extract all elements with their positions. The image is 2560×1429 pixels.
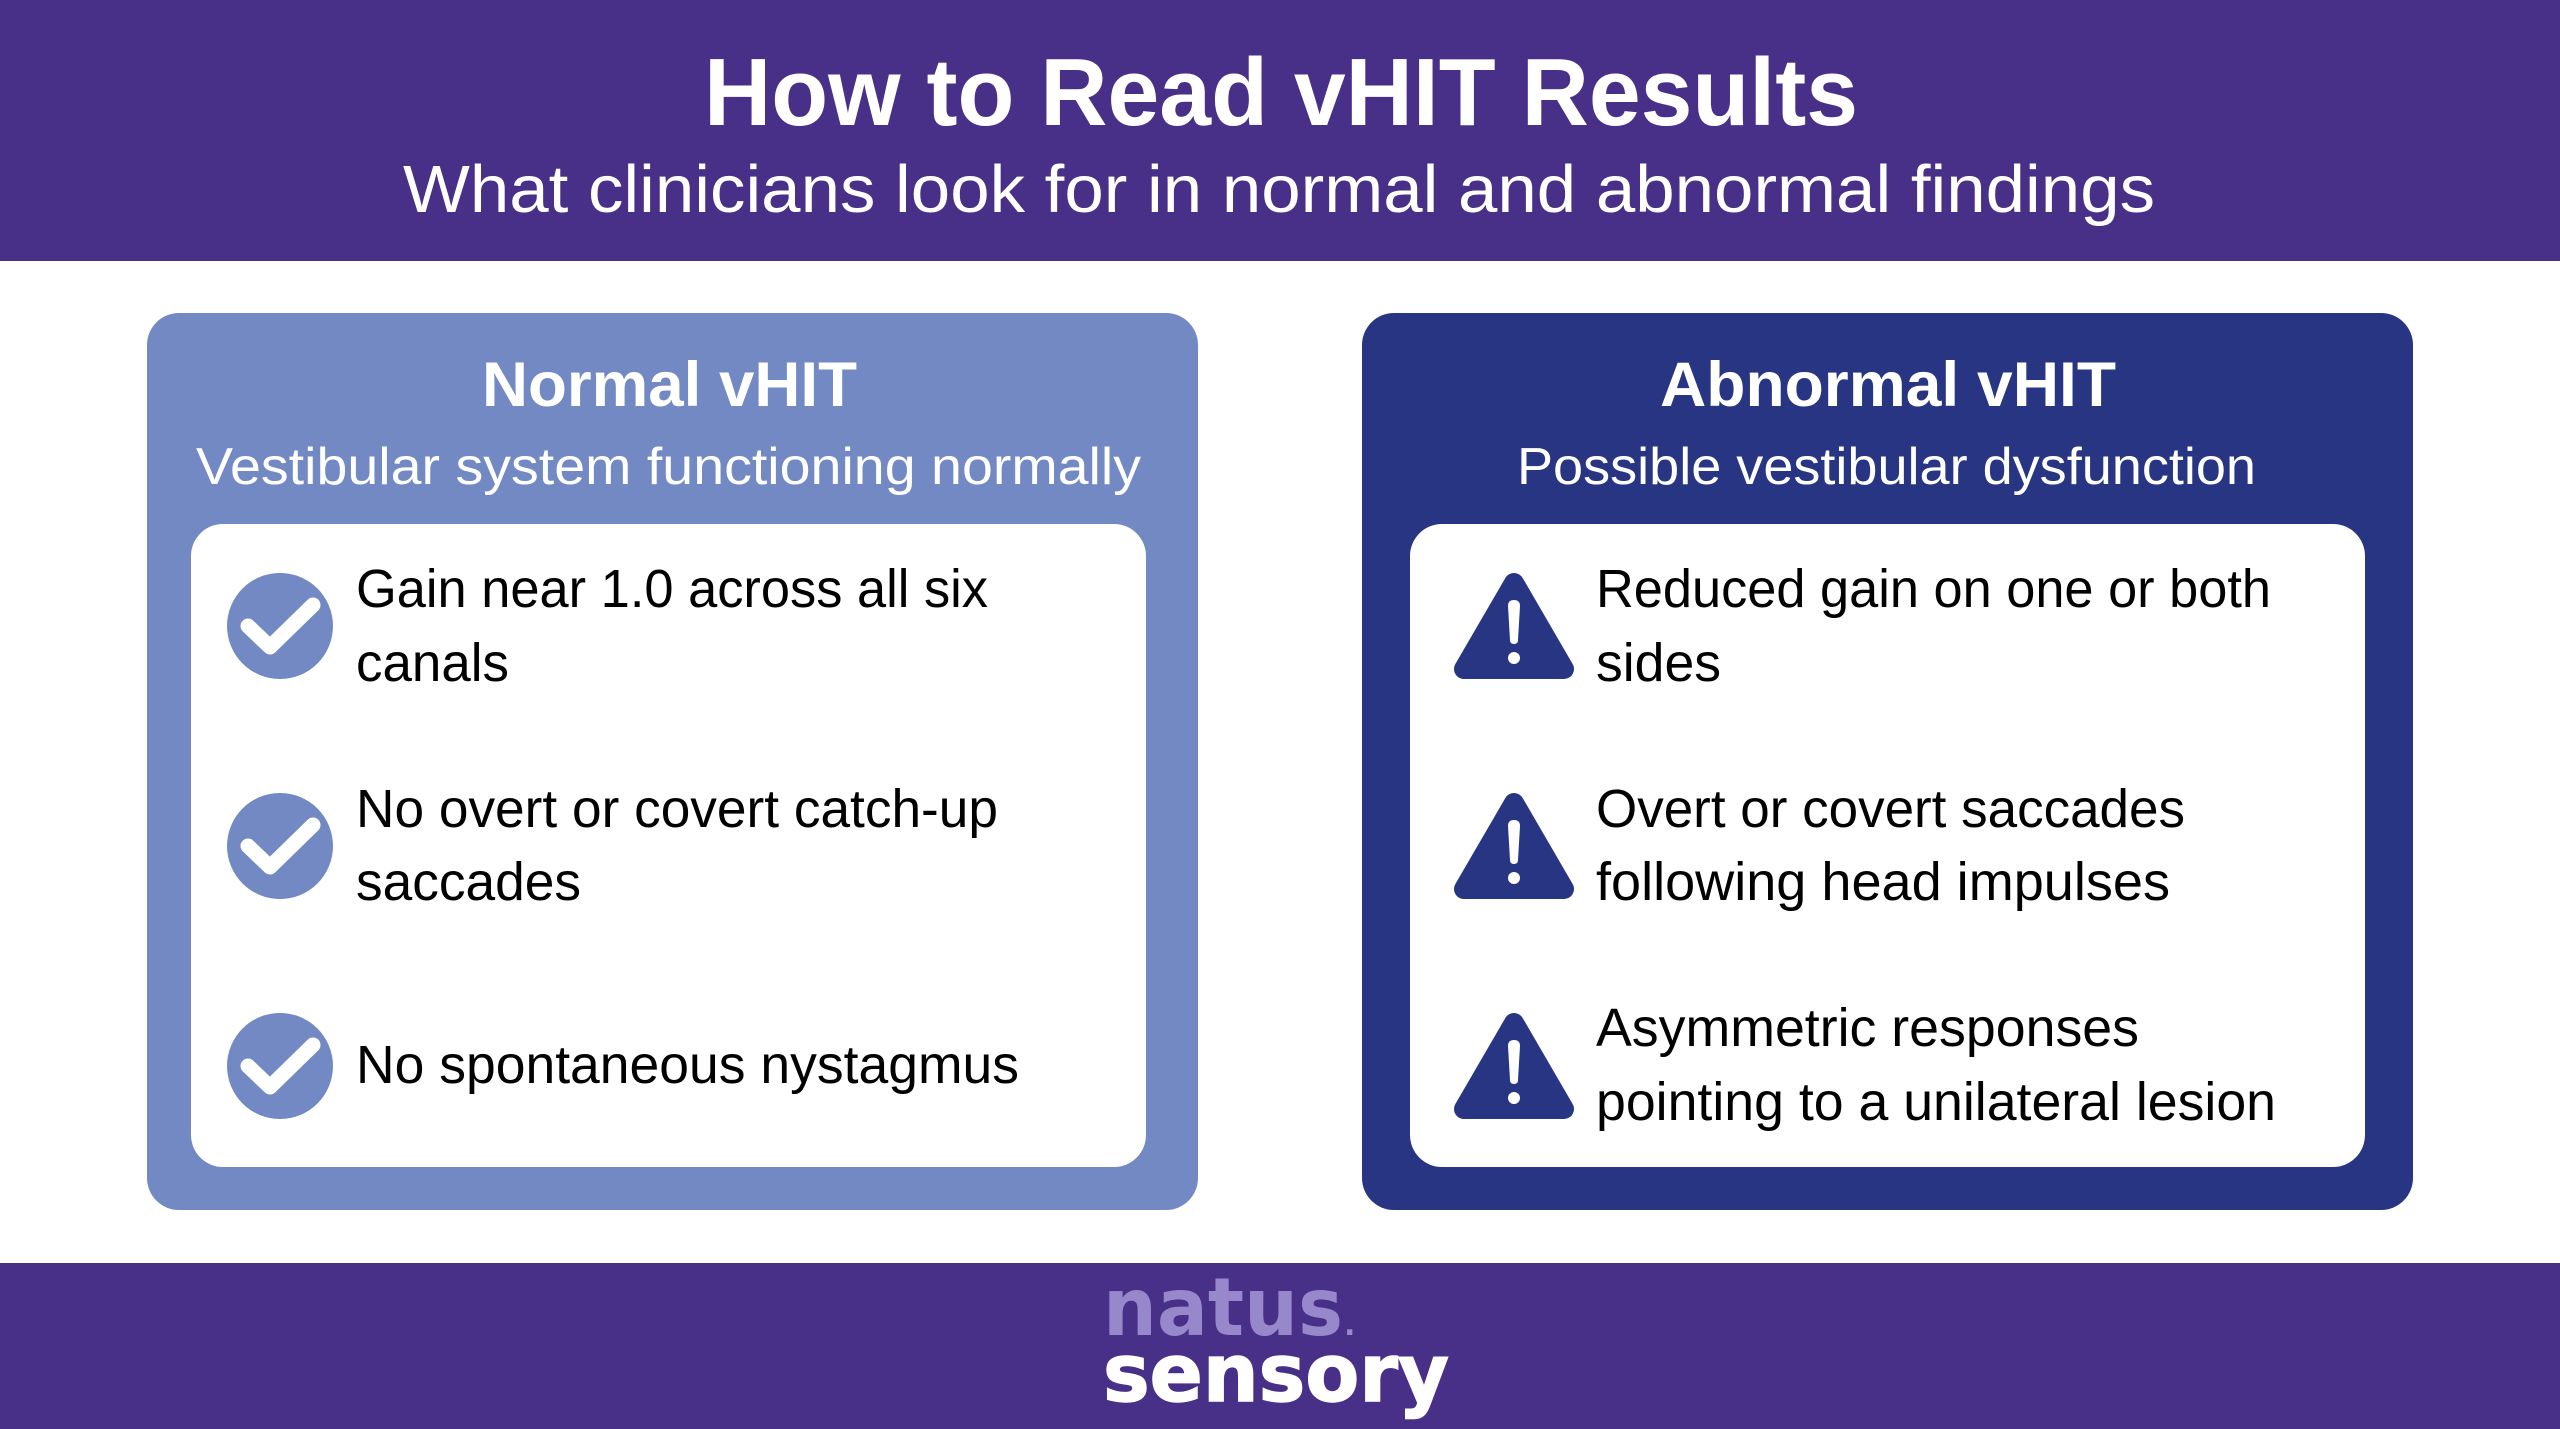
- logo: natus sensory: [1103, 1261, 1449, 1420]
- footer banner: [0, 1261, 2560, 1429]
- list item: no saccades: [227, 779, 998, 912]
- subheading: abnormal: Possible vestibular dysfunction: [1517, 438, 2256, 496]
- icon: warning triangle: [1464, 1023, 1564, 1109]
- list item: gain near 1.0: Gain near 1.0 across all six: [356, 559, 988, 619]
- list item: no nystagmus: [227, 1013, 1019, 1119]
- list item: no saccades: No overt or covert catch-up: [356, 779, 998, 839]
- heading: normal vHIT: Normal vHIT: [482, 350, 857, 420]
- list item: asymmetric: [1464, 998, 2276, 1132]
- icon: check: [227, 1013, 333, 1119]
- icon: check: [227, 573, 333, 679]
- list item: asymmetric: pointing to a unilateral lesion: [1596, 1072, 2276, 1132]
- list item: reduced gain: Reduced gain on one or both: [1596, 559, 2271, 619]
- list item: reduced gain: sides: [1596, 633, 1721, 693]
- subheading: normal: Vestibular system functioning normally: [196, 438, 1141, 496]
- list item: gain near 1.0: canals: [356, 633, 509, 693]
- list item: saccades: following head impulses: [1596, 852, 2170, 912]
- list item: reduced gain: [1464, 559, 2271, 693]
- icon: warning triangle: [1464, 803, 1564, 889]
- header banner: [0, 0, 2560, 261]
- list item: no nystagmus: No spontaneous nystagmus: [356, 1035, 1019, 1095]
- logo: natus sensory: natus: [1103, 1261, 1343, 1354]
- icon: check: [227, 793, 333, 899]
- heading: abnormal vHIT: Abnormal vHIT: [1660, 350, 2116, 420]
- list item: no saccades: saccades: [356, 852, 581, 912]
- logo: natus sensory: .: [1344, 1308, 1355, 1343]
- white list card: normal: [191, 524, 1146, 1167]
- white list card: abnormal: [1410, 524, 2365, 1167]
- list item: saccades: Overt or covert saccades: [1596, 779, 2185, 839]
- title: How to Read vHIT Results: [704, 39, 1858, 146]
- icon: warning triangle: [1464, 583, 1564, 669]
- list item: asymmetric: Asymmetric responses: [1596, 998, 2139, 1058]
- list item: gain near 1.0: [227, 559, 988, 693]
- subtitle: What clinicians look for in normal and abnormal findings: [403, 152, 2155, 227]
- panel: normal vHIT: [147, 313, 1198, 1210]
- logo: natus sensory: sensory: [1103, 1327, 1449, 1420]
- panel: abnormal vHIT: [1362, 313, 2413, 1210]
- list item: saccades: [1464, 779, 2185, 912]
